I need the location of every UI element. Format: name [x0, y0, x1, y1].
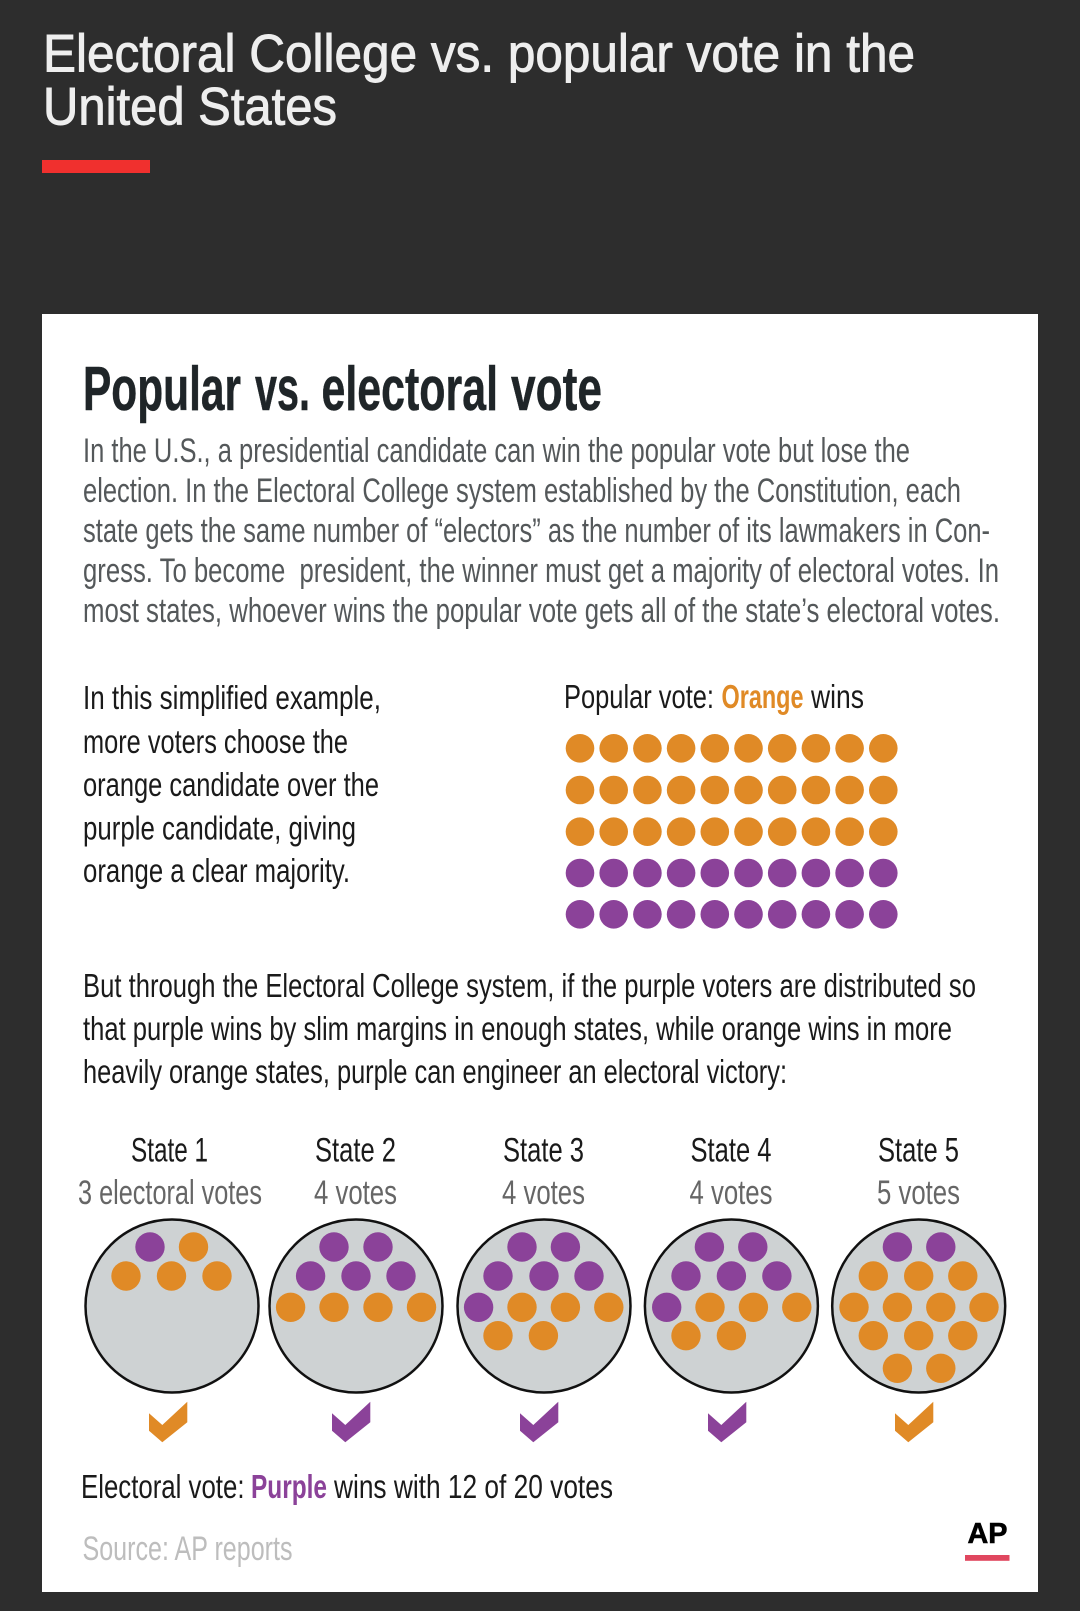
state 1 column: 3 electoral votes — [78, 1174, 262, 1212]
intro paragraph — [83, 432, 1000, 630]
source: Source: AP reports — [82, 1530, 292, 1568]
heading: vote — [511, 355, 602, 424]
heading: electoral — [322, 355, 498, 424]
example explanation text — [83, 680, 381, 890]
electoral college explanation text: heavily orange states, purple can engineer an electoral victory: — [83, 1054, 787, 1091]
state 2 column — [270, 1132, 442, 1442]
state 4 column — [645, 1132, 818, 1442]
red accent bar — [42, 160, 150, 173]
popular vote label — [564, 679, 864, 716]
heading: vs. — [255, 355, 310, 424]
popular vote label: Popular vote: — [564, 679, 714, 716]
heading: Popular — [83, 355, 241, 424]
heading — [83, 355, 602, 424]
electoral vote result — [81, 1469, 613, 1506]
state 4 column: 4 votes — [690, 1174, 772, 1212]
popular vote label: wins — [810, 679, 864, 716]
state 3 column: State 3 — [503, 1132, 584, 1170]
title: United States — [43, 78, 337, 136]
state 5 column — [832, 1132, 1005, 1442]
title — [43, 24, 915, 136]
electoral vote result: wins with 12 of 20 votes — [333, 1469, 613, 1506]
state 1 column: State 1 — [131, 1132, 208, 1170]
popular vote label: Orange — [722, 679, 804, 716]
AP logo: AP — [968, 1518, 1008, 1550]
electoral vote result: Purple — [251, 1469, 327, 1506]
state 5 column: State 5 — [878, 1132, 959, 1170]
state 3 column: 4 votes — [502, 1174, 585, 1212]
state 5 column: 5 votes — [877, 1174, 960, 1212]
title: Electoral College vs. popular vote in the — [43, 24, 915, 84]
popular vote dot grid — [566, 734, 898, 929]
example explanation text: orange candidate over the — [83, 767, 379, 804]
state 2 column: 4 votes — [314, 1174, 397, 1212]
electoral vote result: Electoral vote: — [81, 1469, 244, 1506]
state 2 column: State 2 — [315, 1132, 396, 1170]
example explanation text: purple candidate, giving — [83, 810, 356, 848]
state 4 column: State 4 — [690, 1132, 772, 1170]
state 3 column — [458, 1132, 630, 1442]
panel: white card — [42, 314, 1038, 1592]
state 1 column — [78, 1132, 262, 1442]
example explanation text: orange a clear majority. — [83, 853, 350, 890]
example explanation text: more voters choose the — [83, 724, 348, 761]
AP logo — [965, 1518, 1010, 1561]
electoral college explanation text — [83, 968, 976, 1091]
example explanation text: In this simplified example, — [83, 680, 381, 717]
